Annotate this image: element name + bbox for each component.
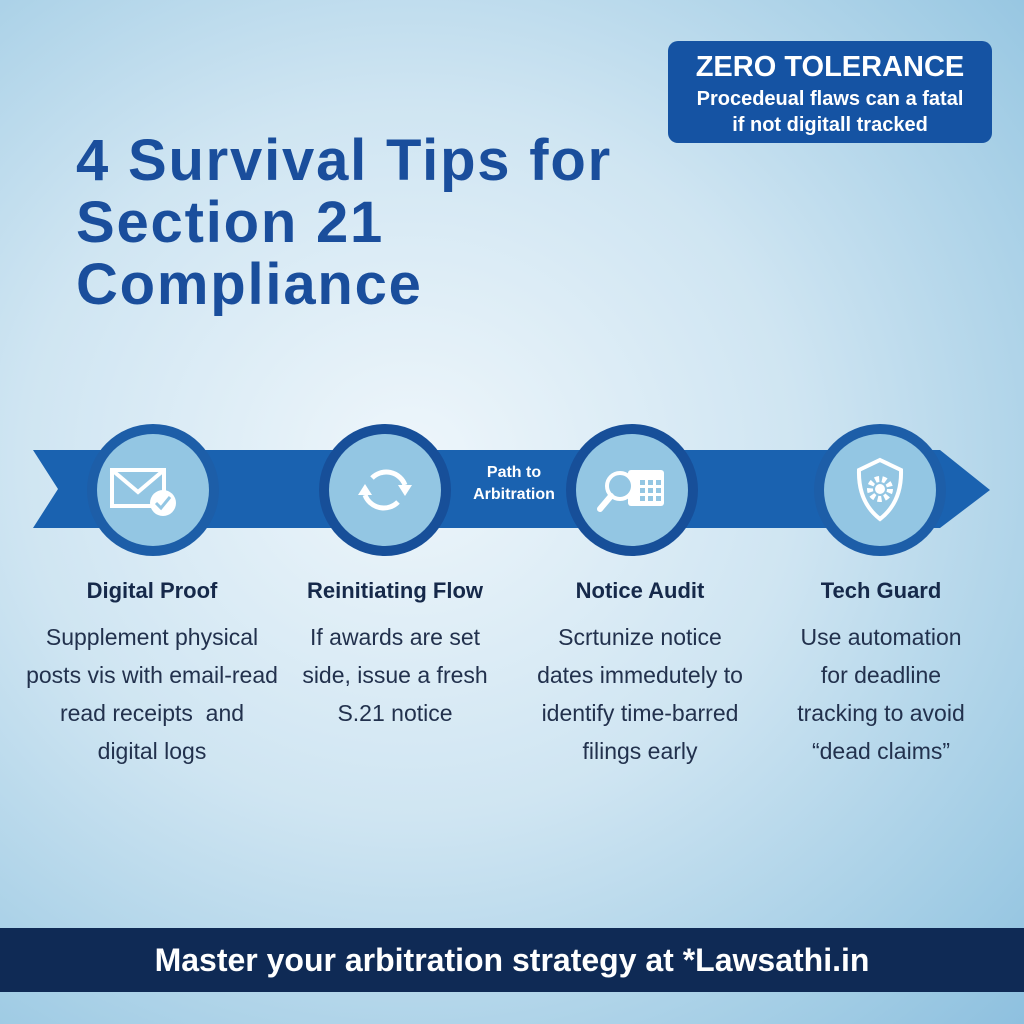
tip 4: tech guard: for deadline xyxy=(821,662,941,688)
tip 4: tech guard: Use automation xyxy=(800,624,962,650)
tip 3: notice audit xyxy=(537,578,743,764)
tip 2: reinitiating flow: Reinitiating Flow xyxy=(307,578,483,603)
icon: envelope check xyxy=(87,424,219,556)
label: path to arbitration: Arbitration xyxy=(473,486,555,503)
label: path to arbitration: Path to xyxy=(487,464,541,481)
tip 3: notice audit: Scrtunize notice xyxy=(558,624,722,650)
tip 4: tech guard xyxy=(797,578,965,764)
label: path to arbitration xyxy=(473,464,555,503)
tip 1: digital proof: posts vis with email-read xyxy=(26,662,278,688)
icon: search calendar xyxy=(566,424,698,556)
footer banner: Master your arbitration strategy at *Lawsathi.in xyxy=(155,942,869,978)
tip 1: digital proof: read receipts and xyxy=(60,700,244,726)
tip 1: digital proof xyxy=(26,578,278,764)
tip 1: digital proof: digital logs xyxy=(98,738,206,764)
callout: zero tolerance xyxy=(668,41,992,143)
tip 4: tech guard: tracking to avoid xyxy=(797,700,965,726)
tip 4: tech guard: Tech Guard xyxy=(821,578,941,603)
tip 3: notice audit: filings early xyxy=(582,738,698,764)
title: Compliance xyxy=(76,252,423,317)
title: 4 Survival Tips for xyxy=(76,128,612,193)
tip 2: reinitiating flow xyxy=(302,578,488,726)
footer banner xyxy=(0,928,1024,992)
title xyxy=(76,128,612,317)
tip 2: reinitiating flow: S.21 notice xyxy=(337,700,453,726)
callout: zero tolerance: Procedeual flaws can a fatal xyxy=(697,88,963,110)
tip 2: reinitiating flow: If awards are set xyxy=(310,624,480,650)
callout: zero tolerance: ZERO TOLERANCE xyxy=(696,51,964,83)
icon: shield gear xyxy=(814,424,946,556)
tip 3: notice audit: identify time-barred xyxy=(542,700,738,726)
tip 4: tech guard: “dead claims” xyxy=(812,738,950,764)
path arrow with icons xyxy=(33,424,990,556)
title: Section 21 xyxy=(76,190,384,255)
arrow band xyxy=(33,450,990,528)
tip 3: notice audit: Notice Audit xyxy=(576,578,704,603)
callout: zero tolerance: if not digitall tracked xyxy=(732,114,928,136)
icon: refresh xyxy=(319,424,451,556)
tip 3: notice audit: dates immedutely to xyxy=(537,662,743,688)
tip 1: digital proof: Digital Proof xyxy=(87,578,217,603)
tip 2: reinitiating flow: side, issue a fresh xyxy=(302,662,488,688)
tip 1: digital proof: Supplement physical xyxy=(46,624,258,650)
